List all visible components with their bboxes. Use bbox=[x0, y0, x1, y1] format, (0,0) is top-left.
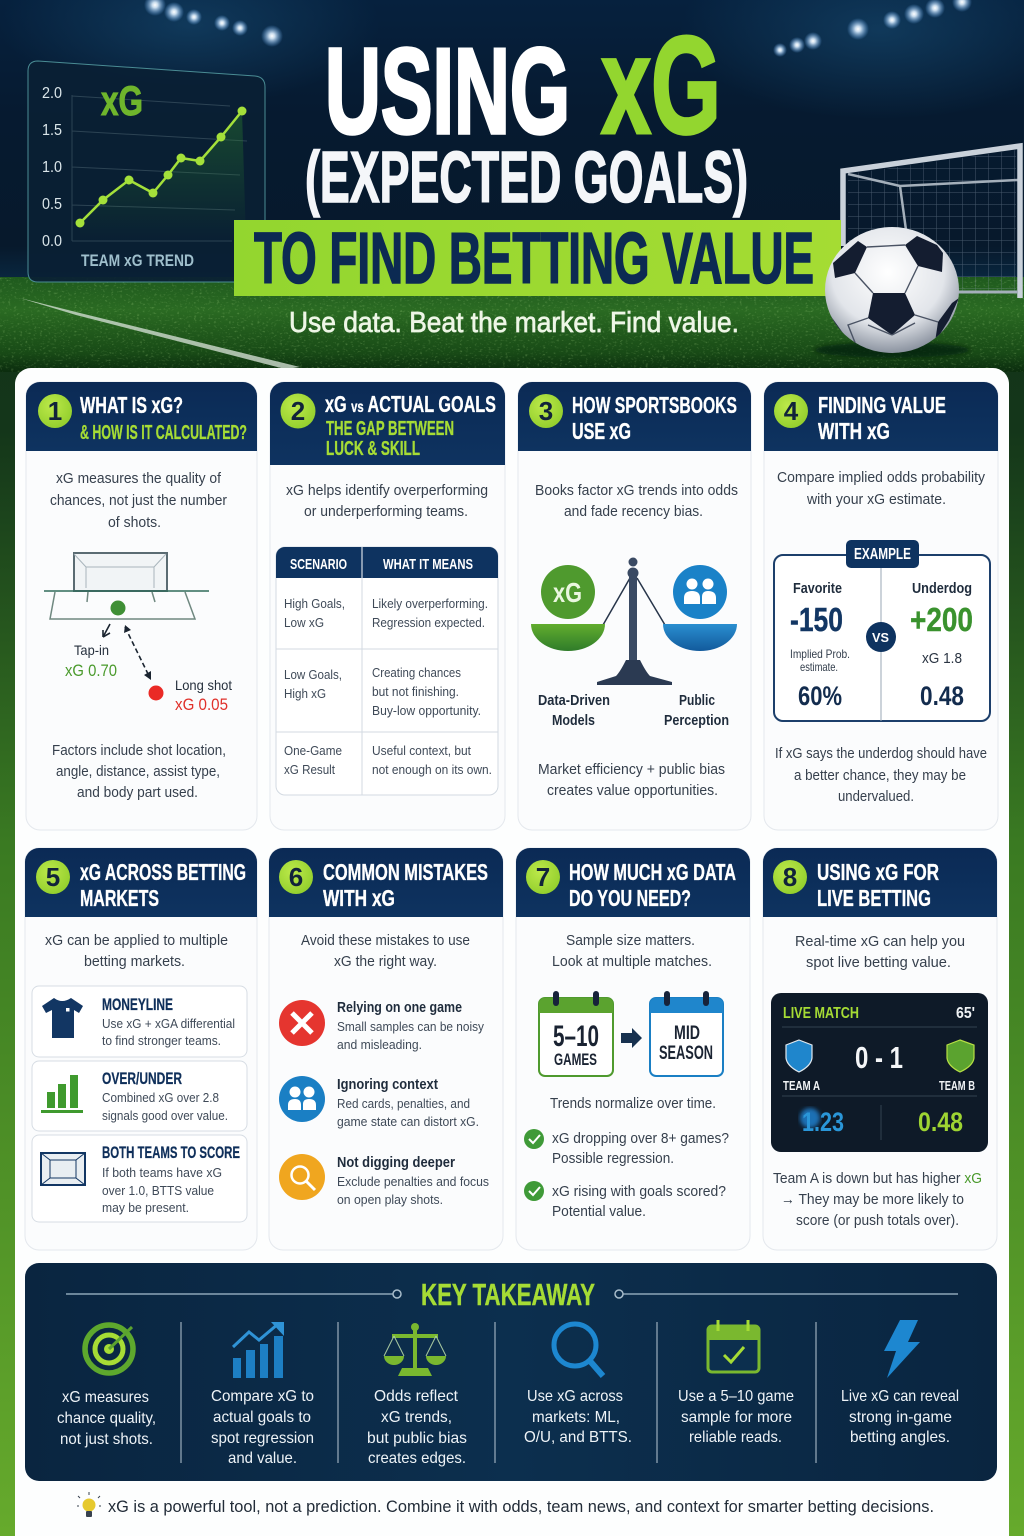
mistake 2 bbox=[279, 1076, 479, 1129]
market row: over/under: Combined xG over 2.8 bbox=[102, 1090, 219, 1105]
takeaway 3: Odds reflect bbox=[374, 1388, 459, 1405]
number badge 1 bbox=[38, 394, 72, 428]
example box: 60% bbox=[798, 681, 842, 711]
checklist item 1: xG dropping over 8+ games? bbox=[552, 1130, 729, 1147]
example box: Favorite bbox=[793, 581, 842, 597]
takeaway 4: Use xG across bbox=[527, 1388, 623, 1405]
checklist item 1: Possible regression. bbox=[552, 1150, 674, 1167]
chart panel: team xG trend: TEAM xG TREND bbox=[81, 251, 194, 270]
scenario table: xG Result bbox=[284, 762, 335, 777]
heading 5: MARKETS bbox=[80, 885, 159, 911]
intro text 1: chances, not just the number bbox=[50, 492, 227, 509]
mistake 2: Red cards, penalties, and bbox=[337, 1096, 470, 1111]
panel 5: xG across betting markets bbox=[25, 848, 257, 1250]
intro text 1 bbox=[50, 470, 227, 531]
example box: Underdog bbox=[912, 581, 972, 597]
number badge 7 bbox=[526, 860, 560, 894]
panel 4: finding value bbox=[764, 382, 998, 830]
scenario table: WHAT IT MEANS bbox=[383, 556, 473, 573]
panel 3: how sportsbooks use xG bbox=[518, 382, 751, 830]
market row: both teams to score: over 1.0, BTTS value bbox=[102, 1183, 214, 1198]
takeaway 3 bbox=[367, 1323, 467, 1467]
heading 1: WHAT IS xG? bbox=[80, 392, 183, 418]
scale labels bbox=[538, 693, 729, 729]
heading 2 bbox=[325, 391, 496, 460]
market row: both teams to score: BOTH TEAMS TO SCORE bbox=[102, 1143, 240, 1162]
takeaway 4: O/U, and BTTS. bbox=[524, 1429, 632, 1446]
checklist item 2: Potential value. bbox=[552, 1203, 646, 1220]
example box: xG 1.8 bbox=[922, 651, 962, 667]
live match scoreboard: 65' bbox=[956, 1005, 975, 1022]
live match scoreboard: 0.48 bbox=[918, 1107, 963, 1137]
takeaway 4 bbox=[524, 1324, 632, 1446]
closing text 8: score (or push totals over). bbox=[796, 1212, 959, 1229]
takeaway 6: Live xG can reveal bbox=[841, 1388, 959, 1405]
intro text 4 bbox=[777, 469, 985, 508]
scenario table: Useful context, but bbox=[372, 743, 471, 758]
intro text 7 bbox=[552, 932, 712, 970]
chart panel: team xG trend bbox=[28, 61, 265, 282]
closing text 3: creates value opportunities. bbox=[547, 782, 718, 799]
example box: estimate. bbox=[800, 660, 838, 674]
intro text 5: betting markets. bbox=[84, 953, 185, 970]
mistake 2: game state can distort xG. bbox=[337, 1114, 479, 1129]
example box bbox=[774, 540, 990, 721]
scenario table: High Goals, bbox=[284, 596, 345, 611]
main white sheet bbox=[15, 368, 1009, 1536]
market row: over/under: OVER/UNDER bbox=[102, 1069, 182, 1088]
scenario table: not enough on its own. bbox=[372, 762, 492, 777]
intro text 2 bbox=[286, 482, 488, 520]
takeaway 2: spot regression bbox=[211, 1430, 314, 1447]
goal diagram: Tap-in bbox=[74, 642, 109, 658]
intro text 2: xG helps identify overperforming bbox=[286, 482, 488, 499]
calendar: mid season: MID bbox=[674, 1023, 700, 1044]
number badge 8: 8 bbox=[783, 862, 797, 892]
takeaway 4: markets: ML, bbox=[532, 1409, 620, 1426]
chart panel: team xG trend: 2.0 bbox=[42, 85, 62, 102]
number badge 2 bbox=[280, 394, 316, 428]
heading 2: LUCK & SKILL bbox=[326, 438, 420, 460]
closing text 8: Team A is down but has higher xG bbox=[773, 1170, 982, 1187]
intro text 6: Avoid these mistakes to use bbox=[301, 932, 470, 949]
scenario table: Regression expected. bbox=[372, 615, 485, 630]
intro text 8 bbox=[795, 933, 965, 971]
takeaway 6: strong in-game bbox=[849, 1409, 952, 1426]
closing text 1 bbox=[52, 742, 226, 801]
closing text 4: If xG says the underdog should have bbox=[775, 745, 987, 762]
heading 6: COMMON MISTAKES bbox=[323, 859, 488, 885]
takeaway 3: but public bias bbox=[367, 1430, 467, 1447]
heading 8: LIVE BETTING bbox=[817, 885, 931, 911]
intro text 2: or underperforming teams. bbox=[304, 503, 468, 520]
key takeaway heading: KEY TAKEAWAY bbox=[421, 1277, 595, 1312]
panel 1: what is xG bbox=[26, 382, 257, 830]
intro text 1: of shots. bbox=[108, 514, 161, 531]
heading 8: USING xG FOR bbox=[817, 859, 939, 885]
soccer ball bbox=[814, 227, 970, 358]
live match scoreboard: TEAM A bbox=[783, 1078, 820, 1093]
panel 8: live betting bbox=[763, 848, 997, 1250]
mistake 1 bbox=[279, 1000, 484, 1052]
takeaway 2: Compare xG to bbox=[211, 1388, 314, 1405]
takeaway 5: Use a 5–10 game bbox=[678, 1388, 794, 1405]
mistake 1: Small samples can be noisy bbox=[337, 1019, 484, 1034]
number badge 8 bbox=[773, 860, 807, 894]
market row: over/under: signals good over value. bbox=[102, 1108, 228, 1123]
scenario table: Buy-low opportunity. bbox=[372, 703, 481, 718]
key takeaway heading bbox=[66, 1277, 958, 1312]
chart panel: team xG trend: 1.0 bbox=[42, 159, 62, 176]
mistake 3: on open play shots. bbox=[337, 1192, 443, 1207]
goal diagram: xG 0.70 bbox=[65, 661, 117, 680]
closing text 4: undervalued. bbox=[838, 788, 914, 805]
mistake 2: Ignoring context bbox=[337, 1077, 438, 1093]
mistake 3: Not digging deeper bbox=[337, 1155, 455, 1171]
number badge 7: 7 bbox=[536, 862, 550, 892]
number badge 3: 3 bbox=[539, 396, 553, 426]
calendar: 5-10 games bbox=[539, 991, 613, 1076]
closing text 1: angle, distance, assist type, bbox=[56, 763, 220, 780]
market row: both teams to score bbox=[32, 1135, 247, 1222]
example box: +200 bbox=[910, 601, 973, 638]
balance scale: xG bbox=[553, 577, 582, 608]
market row: moneyline: to find stronger teams. bbox=[102, 1033, 221, 1048]
takeaway 6 bbox=[841, 1320, 959, 1446]
mistake 1: Relying on one game bbox=[337, 1000, 462, 1016]
takeaway 1: not just shots. bbox=[60, 1431, 153, 1448]
number badge 6: 6 bbox=[289, 862, 303, 892]
panel 7: how much data bbox=[516, 848, 750, 1250]
market row: both teams to score: If both teams have xG bbox=[102, 1165, 222, 1180]
heading 2: xG vs ACTUAL GOALS bbox=[325, 391, 496, 417]
heading 2: THE GAP BETWEEN bbox=[326, 418, 454, 440]
number badge 5 bbox=[36, 860, 70, 894]
market row: moneyline bbox=[32, 986, 247, 1057]
live match scoreboard: TEAM B bbox=[939, 1078, 975, 1093]
number badge 4 bbox=[774, 394, 808, 428]
heading 5 bbox=[80, 859, 246, 911]
icon: light bulb bbox=[77, 1492, 101, 1517]
scenario table: High xG bbox=[284, 686, 326, 701]
intro text 5: xG can be applied to multiple bbox=[45, 932, 228, 949]
title: USING bbox=[325, 23, 570, 159]
goal diagram: Long shot bbox=[175, 677, 232, 693]
checklist item 2 bbox=[524, 1181, 726, 1220]
scenario table: Likely overperforming. bbox=[372, 596, 488, 611]
panel 6: common mistakes bbox=[269, 848, 503, 1250]
closing text 1: Factors include shot location, bbox=[52, 742, 226, 759]
calendar: 5-10 games: 5–10 bbox=[553, 1020, 599, 1053]
intro text 1: xG measures the quality of bbox=[56, 470, 222, 487]
checklist item 1 bbox=[524, 1129, 729, 1167]
number badge 3 bbox=[529, 394, 563, 428]
scenario table bbox=[276, 547, 498, 795]
title: xG bbox=[601, 8, 721, 163]
checklist item 2: xG rising with goals scored? bbox=[552, 1183, 726, 1200]
closing text 8 bbox=[773, 1170, 982, 1229]
number badge 1: 1 bbox=[48, 396, 62, 426]
takeaway 1: xG measures bbox=[62, 1389, 149, 1406]
closing text 4: a better chance, they may be bbox=[794, 767, 966, 784]
closing text 1: and body part used. bbox=[77, 784, 198, 801]
takeaway 1: chance quality, bbox=[57, 1410, 156, 1427]
heading 3 bbox=[572, 392, 737, 444]
market row: over/under bbox=[32, 1061, 247, 1131]
number badge 4: 4 bbox=[784, 396, 799, 426]
takeaway 1 bbox=[57, 1325, 156, 1448]
heading 4: FINDING VALUE bbox=[818, 392, 946, 418]
example box: VS bbox=[872, 630, 889, 645]
arrow between calendars bbox=[621, 1028, 642, 1048]
key takeaway panel bbox=[25, 1263, 997, 1481]
takeaway 3: creates edges. bbox=[368, 1450, 466, 1467]
heading 6 bbox=[323, 859, 488, 911]
tagline: Use data. Beat the market. Find value. bbox=[289, 307, 739, 339]
intro text 3: Books factor xG trends into odds bbox=[535, 482, 738, 499]
example box: 0.48 bbox=[920, 681, 964, 711]
scale labels: Public bbox=[679, 693, 715, 709]
takeaway 2: and value. bbox=[228, 1450, 297, 1467]
calendar: mid season bbox=[650, 991, 723, 1076]
intro text 5 bbox=[45, 932, 228, 970]
live match scoreboard bbox=[771, 993, 988, 1152]
closing text 3: Market efficiency + public bias bbox=[538, 761, 725, 778]
closing text 3 bbox=[538, 761, 725, 799]
title bbox=[305, 8, 748, 218]
heading 7: HOW MUCH xG DATA bbox=[569, 859, 736, 885]
number badge 2: 2 bbox=[291, 396, 305, 426]
title: (EXPECTED GOALS) bbox=[305, 138, 748, 218]
calendar: mid season: SEASON bbox=[659, 1043, 713, 1064]
goal diagram bbox=[44, 553, 232, 714]
heading 6: WITH xG bbox=[323, 885, 395, 911]
example box: Implied Prob. bbox=[790, 647, 850, 661]
balance scale bbox=[531, 558, 737, 685]
intro text 7: Sample size matters. bbox=[566, 932, 695, 949]
mistake 3 bbox=[279, 1154, 489, 1207]
stadium lights bbox=[144, 0, 972, 57]
chart panel: team xG trend: 1.5 bbox=[42, 122, 62, 139]
soccer goal bbox=[843, 146, 1020, 298]
live match scoreboard: 0 - 1 bbox=[855, 1040, 903, 1075]
example box: -150 bbox=[790, 601, 843, 638]
number badge 6 bbox=[279, 860, 313, 894]
heading 1: & HOW IS IT CALCULATED? bbox=[80, 422, 247, 444]
intro text 4: Compare implied odds probability bbox=[777, 469, 985, 486]
heading 3: HOW SPORTSBOOKS bbox=[572, 392, 737, 418]
intro text 4: with your xG estimate. bbox=[806, 491, 946, 508]
intro text 3 bbox=[535, 482, 738, 520]
intro text 7: Look at multiple matches. bbox=[552, 953, 712, 970]
live match scoreboard: 1.23 bbox=[802, 1107, 844, 1137]
chart panel: team xG trend: 0.5 bbox=[42, 196, 62, 213]
mistake 3: Exclude penalties and focus bbox=[337, 1174, 489, 1189]
scenario table: SCENARIO bbox=[290, 556, 347, 573]
intro text 6 bbox=[301, 932, 470, 970]
example box: EXAMPLE bbox=[854, 546, 911, 563]
heading 3: USE xG bbox=[572, 418, 631, 444]
scale labels: Models bbox=[552, 713, 595, 729]
heading 7: DO YOU NEED? bbox=[569, 885, 691, 911]
live match scoreboard: LIVE MATCH bbox=[783, 1005, 859, 1022]
scenario table: One-Game bbox=[284, 743, 342, 758]
takeaway 5: reliable reads. bbox=[689, 1429, 782, 1446]
market row: moneyline: Use xG + xGA differential bbox=[102, 1016, 235, 1031]
heading 1 bbox=[80, 392, 247, 444]
takeaway 2: actual goals to bbox=[213, 1409, 311, 1426]
goal diagram: xG 0.05 bbox=[175, 695, 228, 714]
market row: both teams to score: may be present. bbox=[102, 1200, 189, 1215]
scenario table: Creating chances bbox=[372, 665, 461, 680]
takeaway 2 bbox=[211, 1322, 314, 1467]
heading 7 bbox=[569, 859, 736, 911]
scenario table: Low xG bbox=[284, 615, 324, 630]
chart panel: team xG trend: 0.0 bbox=[42, 233, 62, 250]
calendar: 5-10 games: GAMES bbox=[554, 1050, 597, 1069]
trends text: Trends normalize over time. bbox=[550, 1095, 716, 1112]
pitch line bbox=[20, 298, 300, 369]
footer note with light bulb: xG is a powerful tool, not a prediction. Combine it with odds, team news, and context for smarter betting decisions. bbox=[108, 1497, 934, 1516]
market row: moneyline: MONEYLINE bbox=[102, 995, 173, 1014]
scale labels: Perception bbox=[664, 713, 729, 729]
takeaway 5: sample for more bbox=[681, 1409, 792, 1426]
chart panel: team xG trend: xG bbox=[101, 77, 143, 124]
takeaway 3: xG trends, bbox=[381, 1409, 452, 1426]
scale labels: Data-Driven bbox=[538, 693, 610, 709]
takeaway 5 bbox=[678, 1320, 794, 1446]
mistake 1: and misleading. bbox=[337, 1037, 422, 1052]
heading 4 bbox=[818, 392, 946, 444]
takeaway 6: betting angles. bbox=[850, 1429, 950, 1446]
closing text 8: → They may be more likely to bbox=[781, 1191, 964, 1208]
number badge 5: 5 bbox=[46, 862, 60, 892]
panel 2: xG vs actual goals bbox=[270, 382, 505, 830]
intro text 6: xG the right way. bbox=[334, 953, 437, 970]
scenario table: but not finishing. bbox=[372, 684, 459, 699]
intro text 8: Real-time xG can help you bbox=[795, 933, 965, 950]
heading 5: xG ACROSS BETTING bbox=[80, 859, 246, 885]
heading 4: WITH xG bbox=[818, 418, 890, 444]
intro text 8: spot live betting value. bbox=[806, 954, 951, 971]
intro text 3: and fade recency bias. bbox=[564, 503, 703, 520]
closing text 4 bbox=[775, 745, 987, 805]
heading 8 bbox=[817, 859, 939, 911]
scenario table: Low Goals, bbox=[284, 667, 342, 682]
